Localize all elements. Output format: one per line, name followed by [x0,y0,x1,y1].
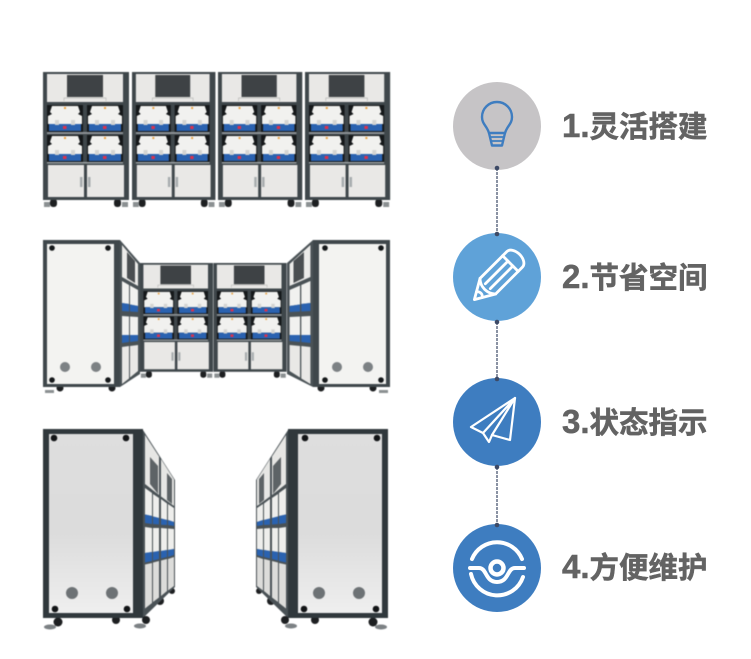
dashed connector 2 to 3 [495,320,499,381]
heading: 4: 4.方便维护 [562,548,708,585]
photo: cabinets arranged in U shape [43,240,390,393]
dashed connector 1 to 2 [495,166,499,236]
dashed connector 3 to 4 [495,465,499,527]
heading: 1: 1.灵活搭建 [562,107,708,144]
icon: paper plane [453,378,541,466]
icon: light bulb [453,82,541,170]
heading: 2: 2.节省空间 [562,258,708,295]
icon: maintenance emblem [453,524,541,612]
heading: 3: 3.状态指示 [562,403,708,440]
icon: pencil [453,233,541,321]
photo: cabinet side view left [43,429,175,630]
photo: four cabinets front view [43,72,390,207]
photo: cabinet side view right [256,429,388,630]
